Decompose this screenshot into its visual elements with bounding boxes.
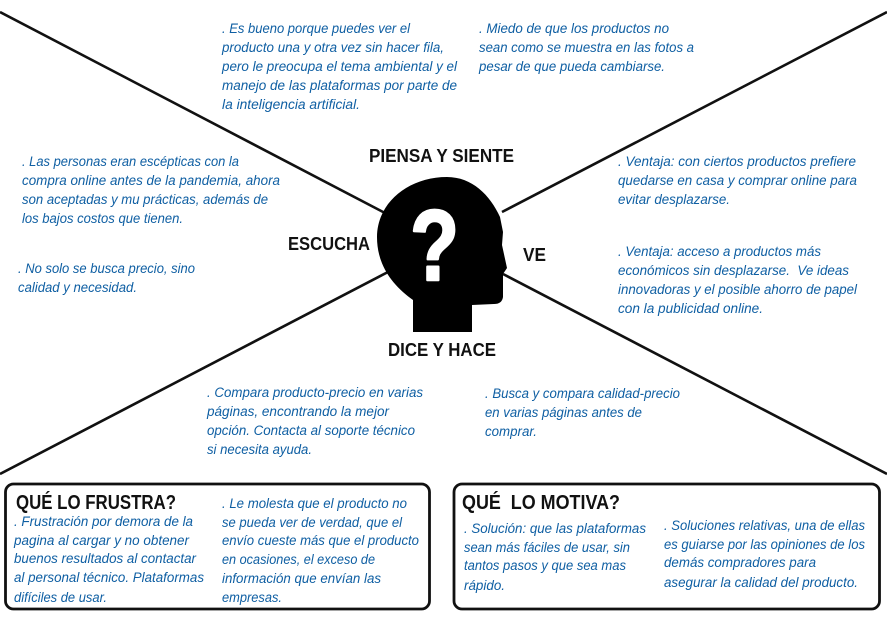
frustration text right: envío cueste más que el producto xyxy=(222,533,419,548)
text block: escucha upper: son aceptadas y mu prácticas, además de xyxy=(22,192,268,207)
motivation text right xyxy=(664,518,865,590)
text block: escucha upper: . Las personas eran escépticas con la xyxy=(22,154,239,169)
panel: qué lo frustra xyxy=(6,484,430,609)
text block: piensa y siente left xyxy=(221,21,458,112)
frustration text right: se pueda ver de verdad, que el xyxy=(222,515,403,530)
text block: piensa y siente left: producto una y otra vez sin hacer fila, xyxy=(221,40,444,55)
panel: qué lo motiva xyxy=(454,484,880,609)
motivation text right: asegurar la calidad del producto. xyxy=(664,575,858,590)
text block: escucha upper xyxy=(22,154,280,226)
text block: dice y hace right: comprar. xyxy=(485,424,537,439)
frustration text left: pagina al cargar y no obtener xyxy=(13,533,189,548)
text block: dice y hace right: . Busca y compara calidad-precio xyxy=(485,386,680,401)
frustration text right: empresas. xyxy=(222,590,282,605)
heading: escucha: ESCUCHA xyxy=(288,234,370,254)
text block: dice y hace left: páginas, encontrando la mejor xyxy=(206,404,389,419)
frustration text right xyxy=(222,496,419,605)
text block: dice y hace left: si necesita ayuda. xyxy=(207,442,312,457)
heading: piensa y siente: PIENSA Y SIENTE xyxy=(369,146,514,166)
frustration text right: información que envían las xyxy=(222,571,381,586)
text block: piensa y siente right: sean como se muestra en las fotos a xyxy=(479,40,694,55)
frustration text left: al personal técnico. Plataformas xyxy=(14,570,204,585)
motivation text left: rápido. xyxy=(464,578,505,593)
text block: dice y hace left xyxy=(206,385,423,457)
text block: escucha upper: compra online antes de la pandemia, ahora xyxy=(22,173,280,188)
icon: head with question mark xyxy=(377,177,507,332)
panel heading: qué lo motiva: QUÉ LO MOTIVA? xyxy=(462,491,620,514)
frustration text left: buenos resultados al contactar xyxy=(14,551,196,566)
text block: ve upper xyxy=(618,154,857,207)
text block: dice y hace left: . Compara producto-precio en varias xyxy=(207,385,423,400)
heading: dice y hace: DICE Y HACE xyxy=(388,340,496,360)
frustration text left: . Frustración por demora de la xyxy=(14,514,193,529)
text block: piensa y siente left: la inteligencia artificial. xyxy=(222,97,360,112)
motivation text left xyxy=(464,521,646,593)
text block: piensa y siente left: . Es bueno porque puedes ver el xyxy=(222,21,411,36)
text block: ve lower: económicos sin desplazarse. Ve ideas xyxy=(618,263,849,278)
motivation text left: . Solución: que las plataformas xyxy=(464,521,646,536)
panel heading: qué lo frustra: QUÉ LO FRUSTRA? xyxy=(16,491,176,514)
frustration text left: difíciles de usar. xyxy=(14,590,107,605)
motivation text right: . Soluciones relativas, una de ellas xyxy=(664,518,865,533)
text block: escucha upper: los bajos costos que tienen. xyxy=(22,211,183,226)
text block: piensa y siente left: pero le preocupa el tema ambiental y el xyxy=(221,59,458,74)
text block: escucha lower: . No solo se busca precio, sino xyxy=(18,261,195,276)
motivation text left: sean más fáciles de usar, sin xyxy=(464,540,630,555)
motivation text right: es guiarse por las opiniones de los xyxy=(664,537,865,552)
text block: piensa y siente left: manejo de las plataformas por parte de xyxy=(222,78,457,93)
diagonal dividers xyxy=(0,12,887,474)
text block: dice y hace right xyxy=(485,386,680,439)
frustration text right: en ocasiones, el exceso de xyxy=(222,552,375,567)
text block: ve lower: . Ventaja: acceso a productos más xyxy=(618,244,821,259)
text block: ve lower: con la publicidad online. xyxy=(618,301,763,316)
text block: dice y hace left: opción. Contacta al soporte técnico xyxy=(207,423,415,438)
frustration text left xyxy=(13,514,204,605)
text block: ve upper: quedarse en casa y comprar online para xyxy=(618,173,857,188)
text block: piensa y siente right: . Miedo de que los productos no xyxy=(479,21,669,36)
text block: ve upper: . Ventaja: con ciertos productos prefiere xyxy=(618,154,856,169)
text block: piensa y siente right: pesar de que pueda cambiarse. xyxy=(478,59,665,74)
text block: ve lower: innovadoras y el posible ahorro de papel xyxy=(618,282,858,297)
text block: escucha lower: calidad y necesidad. xyxy=(18,280,137,295)
motivation text left: tantos pasos y que sea mas xyxy=(464,558,626,573)
text block: dice y hace right: en varias páginas antes de xyxy=(485,405,642,420)
text block: ve upper: evitar desplazarse. xyxy=(618,192,730,207)
icon: head with question mark: ? xyxy=(410,191,459,302)
text block: escucha lower xyxy=(18,261,195,295)
text block: ve lower xyxy=(618,244,858,316)
heading: ve: VE xyxy=(523,245,546,265)
frustration text right: . Le molesta que el producto no xyxy=(222,496,407,511)
text block: piensa y siente right xyxy=(478,21,694,74)
motivation text right: demás compradores para xyxy=(664,555,816,570)
